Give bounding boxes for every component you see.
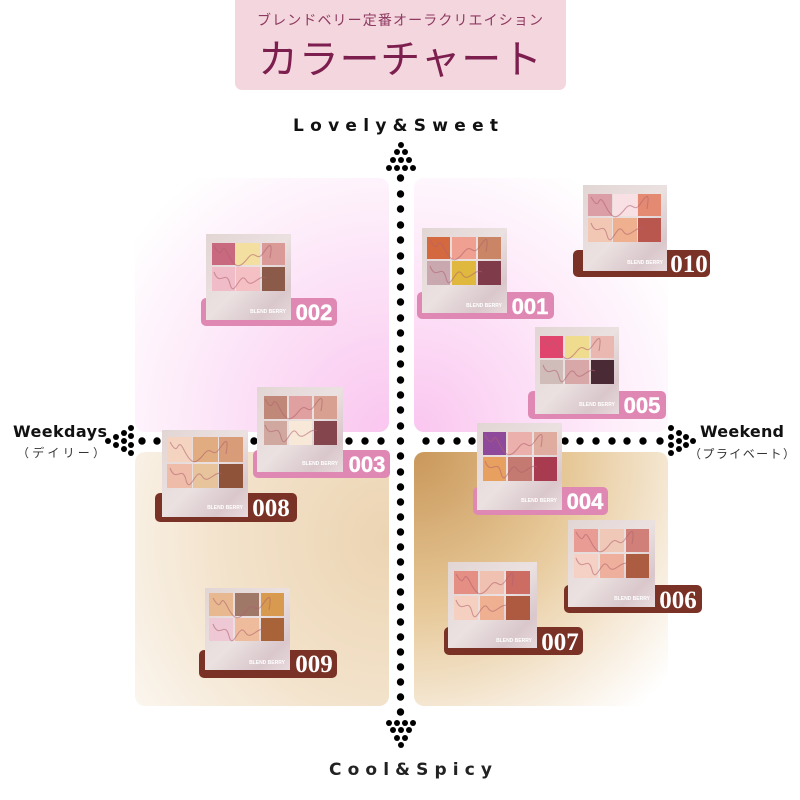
palette 010 bbox=[573, 185, 710, 278]
quadrant: lovely weekdays bbox=[135, 178, 389, 432]
subtitle: ブレンドベリー定番オーラクリエイション bbox=[257, 12, 543, 28]
right axis label: （プライベート） bbox=[689, 447, 795, 461]
quadrant: cool weekend bbox=[414, 452, 668, 706]
palette 007: 007 bbox=[541, 629, 579, 656]
left axis label bbox=[13, 422, 107, 460]
palette 007 bbox=[444, 562, 583, 656]
palette 006 bbox=[564, 520, 702, 614]
palette 003: BLEND BERRY bbox=[302, 461, 339, 467]
title: カラーチャート bbox=[258, 38, 542, 82]
palette 010: BLEND BERRY bbox=[627, 260, 664, 266]
palette 005 bbox=[528, 327, 666, 419]
palette 002: BLEND BERRY bbox=[250, 309, 287, 315]
palette 004 bbox=[473, 423, 608, 515]
palette 008: 008 bbox=[252, 495, 290, 522]
palette 001 bbox=[417, 228, 554, 319]
palette 004: 004 bbox=[567, 489, 604, 514]
palette 004: BLEND BERRY bbox=[521, 498, 558, 504]
palette 009: BLEND BERRY bbox=[249, 660, 286, 666]
palette 001: BLEND BERRY bbox=[466, 303, 503, 309]
palette 006: BLEND BERRY bbox=[614, 596, 651, 602]
vertical axis with arrows bbox=[386, 142, 416, 748]
bottom axis label: Cool&Spicy bbox=[329, 760, 492, 780]
right axis label: Weekend bbox=[700, 422, 784, 441]
horizontal axis with arrows bbox=[105, 425, 696, 456]
palette 008 bbox=[155, 430, 297, 522]
palette 006: 006 bbox=[659, 587, 697, 614]
palette 002: 002 bbox=[296, 300, 332, 325]
palette 008: BLEND BERRY bbox=[207, 505, 244, 511]
top axis label: Lovely&Sweet bbox=[293, 116, 498, 136]
palette 009 bbox=[199, 588, 337, 678]
quadrant: cool weekdays bbox=[135, 452, 389, 706]
palette 005: BLEND BERRY bbox=[579, 402, 616, 408]
palette 007: BLEND BERRY bbox=[496, 638, 533, 644]
palette 003: 003 bbox=[349, 452, 385, 477]
palette 010: 010 bbox=[670, 251, 708, 278]
left axis label: Weekdays bbox=[13, 422, 107, 441]
palette 003 bbox=[253, 387, 390, 478]
right axis label bbox=[689, 422, 795, 461]
palette 009: 009 bbox=[295, 651, 333, 678]
palette 001: 001 bbox=[512, 294, 548, 319]
left axis label: （デイリー） bbox=[17, 445, 105, 460]
palette 005: 005 bbox=[624, 393, 660, 418]
title panel bbox=[235, 0, 566, 90]
palette 002 bbox=[201, 234, 337, 326]
quadrant: lovely weekend bbox=[414, 178, 668, 432]
